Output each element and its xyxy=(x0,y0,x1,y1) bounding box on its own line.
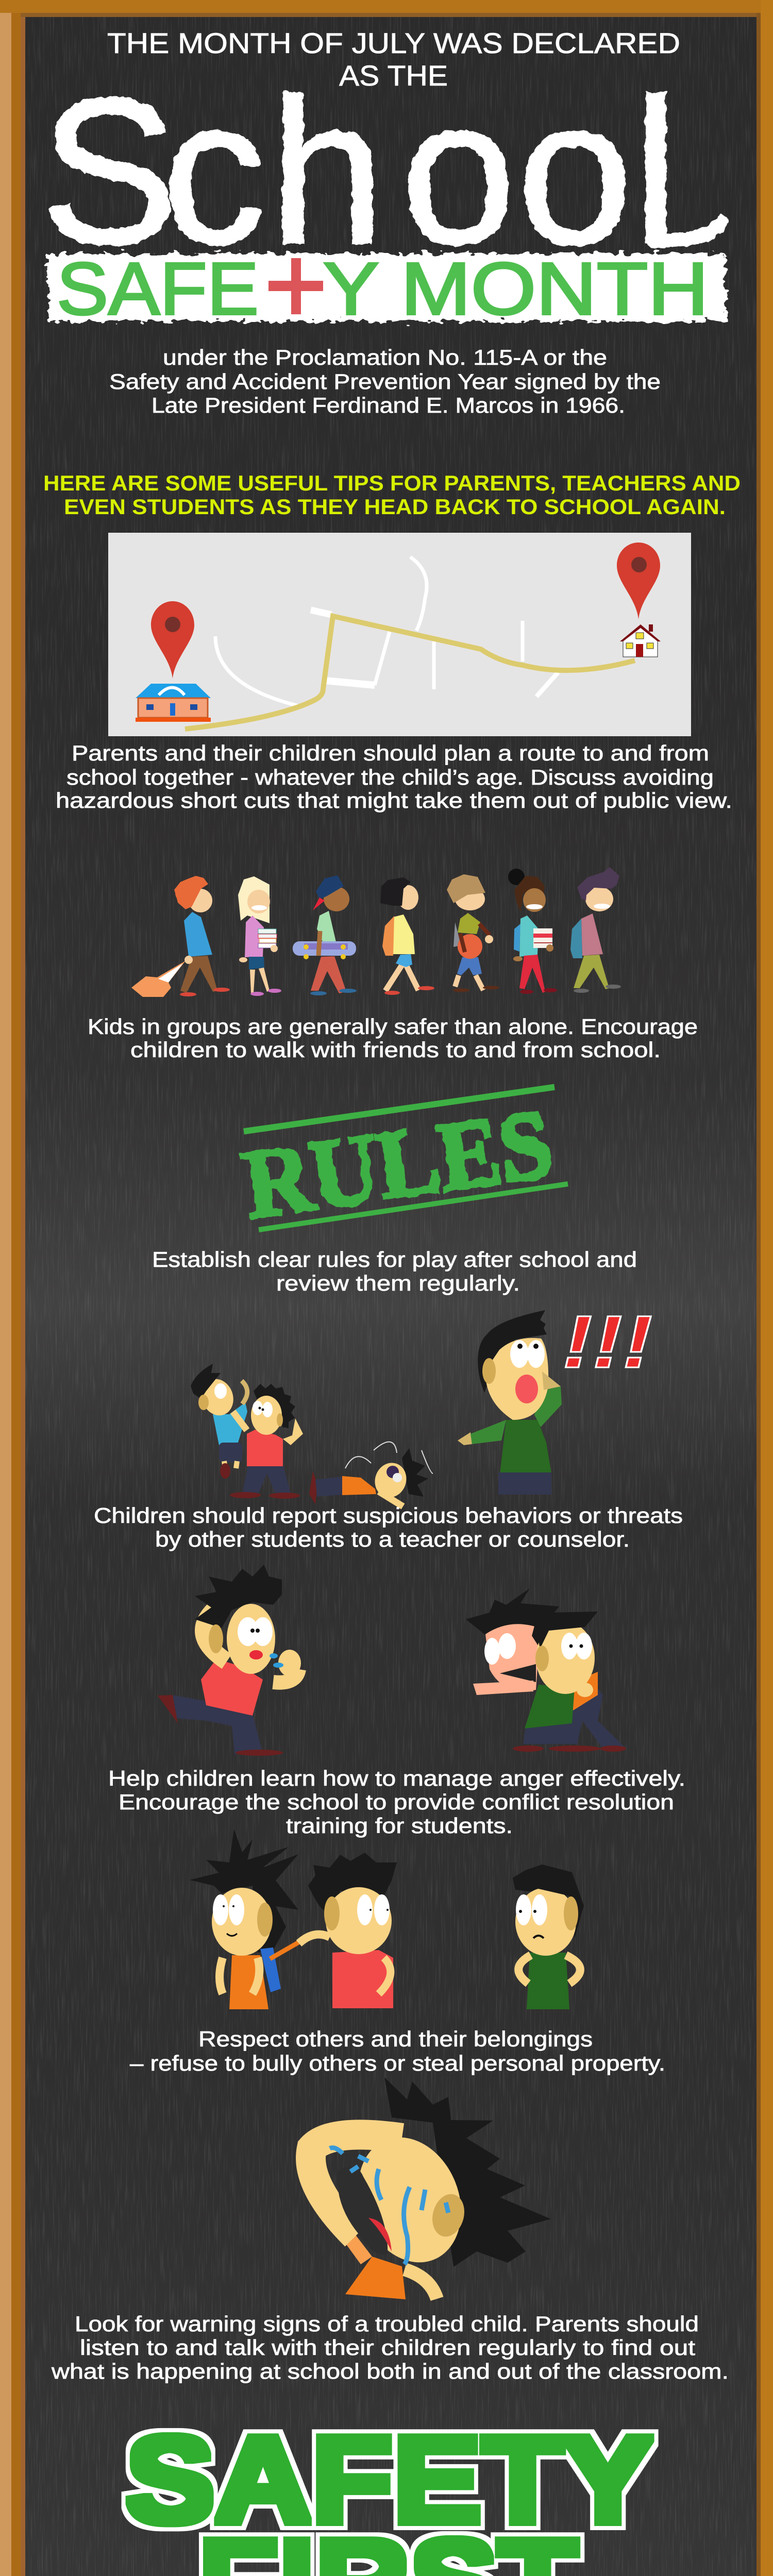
illustration: two boys fighting xyxy=(466,1588,626,1752)
kid: navy cap with skateboard xyxy=(293,875,357,995)
icon: home pin xyxy=(617,543,660,619)
heading: Safety First: SAFETY xyxy=(126,2412,652,2548)
yellow intro: HERE ARE SOME USEFUL TIPS FOR PARENTS, TEACHERS AND xyxy=(43,471,741,495)
kid: purple hair with backpack xyxy=(570,867,621,993)
illustration: seven kids walking xyxy=(131,867,621,997)
tip text: kids in groups xyxy=(88,1014,698,1062)
tip text: report threats xyxy=(94,1503,683,1551)
tip text: respect others xyxy=(130,2027,665,2075)
character: boy with backpack xyxy=(190,1829,300,2009)
character: boy lifting smaller child xyxy=(191,1364,303,1499)
title: AS THE xyxy=(339,59,448,92)
icon: school pin xyxy=(151,601,194,679)
illustration: angry boy xyxy=(158,1565,301,1756)
tip text: report threats: by other students to a teacher or counselor. xyxy=(155,1527,630,1551)
icon: school building xyxy=(136,684,211,722)
character: shouting boy in green xyxy=(458,1310,562,1495)
tip text: manage anger: Help children learn how to manage anger effectively. xyxy=(108,1766,685,1790)
tip text: warning signs xyxy=(51,2312,729,2383)
kid: beanie with basketball xyxy=(447,874,499,992)
map: route from school to home xyxy=(108,533,691,736)
illustration: children reporting a fight xyxy=(191,1300,652,1506)
banner: Safety Month: SAFE xyxy=(57,247,259,330)
tip text: plan a route: hazardous short cuts that might take them out of public view. xyxy=(56,788,732,812)
character: boy in green watching xyxy=(513,1865,584,2009)
tip text: respect others: – refuse to bully others or steal personal property. xyxy=(130,2051,665,2075)
title: THE MONTH OF JULY WAS DECLARED xyxy=(107,27,680,59)
yellow intro: EVEN STUDENTS AS THEY HEAD BACK TO SCHOOL AGAIN. xyxy=(64,495,726,519)
character: boy in red xyxy=(299,1853,397,2008)
tip text: manage anger: training for students. xyxy=(286,1814,513,1838)
proclamation text xyxy=(109,345,661,417)
kid: dark hair bun with books xyxy=(508,869,557,994)
yellow intro xyxy=(43,471,741,519)
exclamation marks: !!! xyxy=(562,1300,652,1383)
proclamation text: Safety and Accident Prevention Year signed by the xyxy=(109,369,661,394)
illustration: crying child xyxy=(311,2077,551,2299)
icon: house xyxy=(620,624,661,657)
tip text: clear rules: Establish clear rules for play after school and xyxy=(152,1247,637,1272)
proclamation text: under the Proclamation No. 115-A or the xyxy=(163,345,607,369)
kid: red hair with bag xyxy=(131,876,230,997)
kid: blonde hair with books xyxy=(238,876,281,996)
banner: Safety Month xyxy=(47,247,726,330)
chalk word: School: School xyxy=(40,56,679,286)
tip text: plan a route: school together - whatever the child’s age. Discuss avoiding xyxy=(66,765,714,789)
kid: black hair with orange backpack xyxy=(380,877,434,995)
tip text: plan a route xyxy=(56,741,732,812)
tip text: plan a route: Parents and their children should plan a route to and from xyxy=(72,741,709,765)
stamp: RULES: RULES xyxy=(238,1089,559,1240)
character: knocked-down boy xyxy=(309,1442,433,1506)
tip text: warning signs: listen to and talk with their children regularly to find out xyxy=(80,2335,695,2360)
tip text: warning signs: what is happening at school both in and out of the classroom. xyxy=(51,2359,729,2383)
proclamation text: Late President Ferdinand E. Marcos in 1966. xyxy=(152,393,625,417)
tip text: respect others: Respect others and their belongings xyxy=(198,2027,593,2051)
title xyxy=(107,27,680,92)
tip text: kids in groups: Kids in groups are generally safer than alone. Encourage xyxy=(88,1014,698,1039)
banner: Safety Month: Y MONTH xyxy=(323,247,709,330)
tip text: clear rules: review them regularly. xyxy=(276,1271,520,1295)
tip text: kids in groups: children to walk with friends to and from school. xyxy=(130,1038,661,1062)
illustration: boy stealing a pencil xyxy=(190,1829,584,2009)
tip text: clear rules xyxy=(152,1247,637,1295)
tip text: report threats: Children should report suspicious behaviors or threats xyxy=(94,1503,683,1528)
tip text: manage anger xyxy=(108,1766,685,1838)
tip text: warning signs: Look for warning signs of a troubled child. Parents should xyxy=(75,2312,699,2336)
tip text: manage anger: Encourage the school to provide conflict resolution xyxy=(119,1790,674,1814)
